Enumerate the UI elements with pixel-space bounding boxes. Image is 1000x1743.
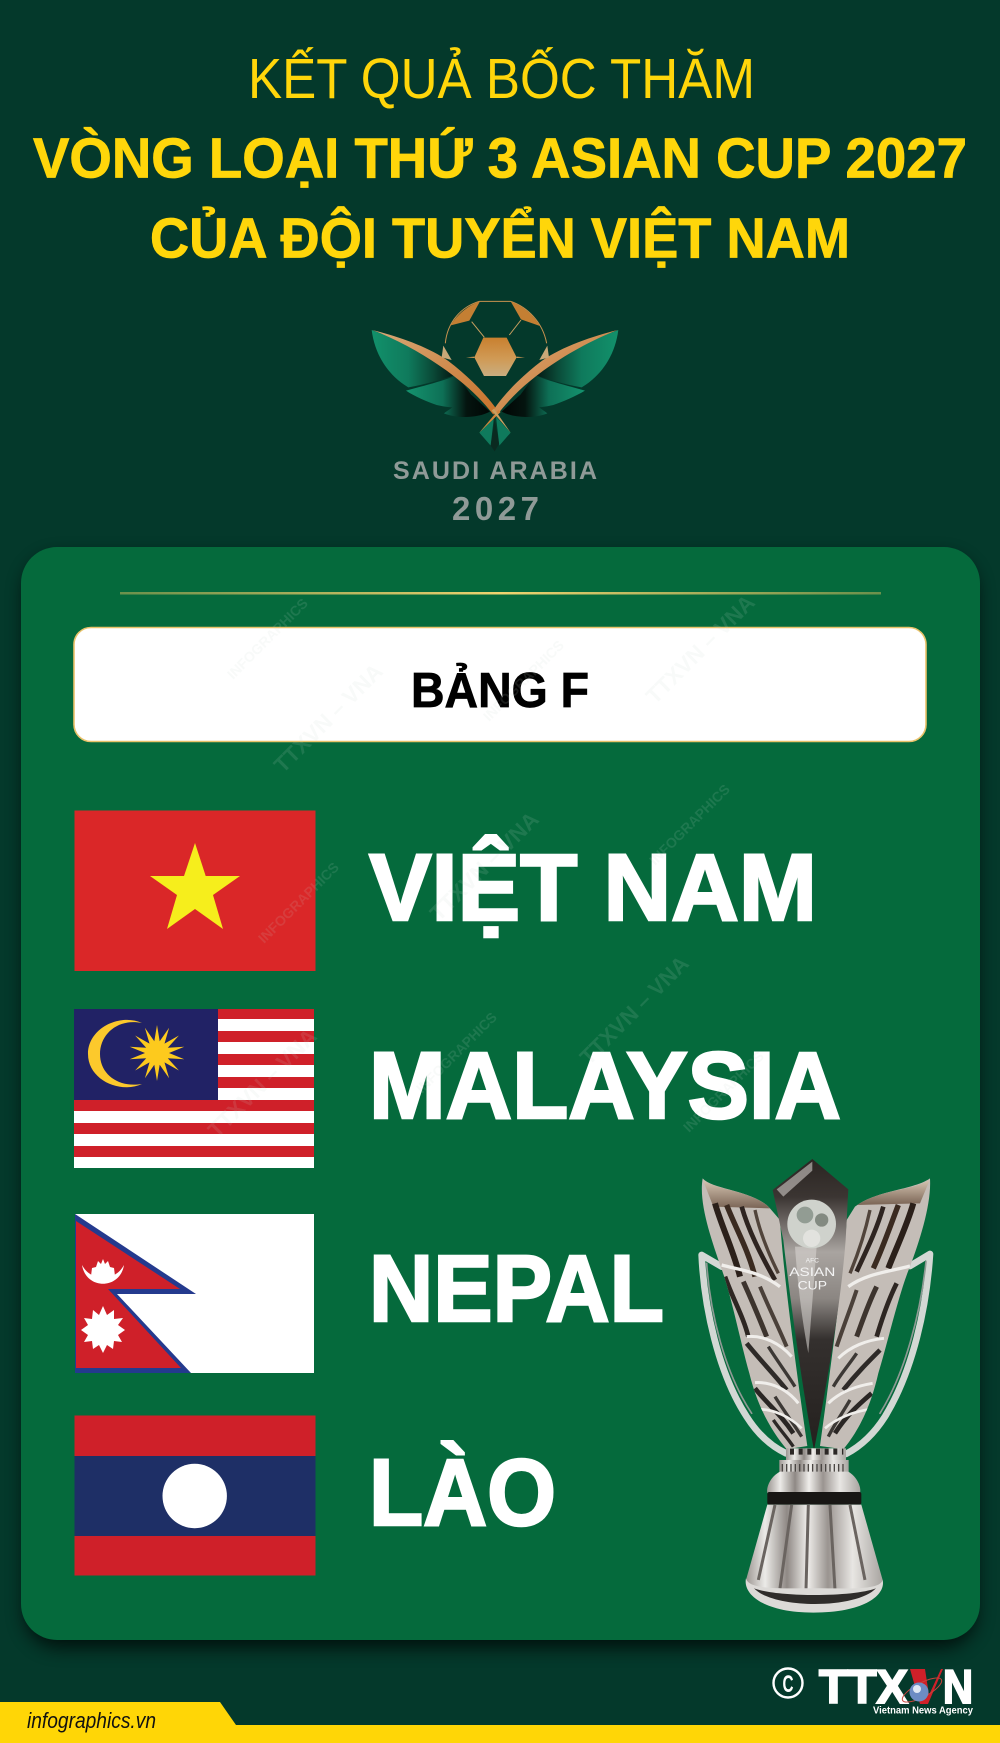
flag: Nepal	[75, 1214, 314, 1373]
panel shadow	[24, 556, 977, 1648]
central blade: AFC	[806, 1258, 819, 1265]
central blade: ASIAN	[789, 1265, 835, 1279]
watermarks: TTXVN – VNA	[425, 807, 544, 926]
copyright symbol	[774, 1668, 802, 1698]
central blade	[773, 1159, 848, 1450]
title: VÒNG LOẠI THỨ 3 ASIAN CUP 2027	[33, 126, 967, 190]
watermarks: INFOGRAPHICS	[646, 781, 733, 868]
left leaf	[702, 1178, 807, 1449]
logo: Saudi Arabia 2027: 2027	[452, 490, 539, 527]
country: Nepal: NEPAL	[369, 1236, 664, 1342]
decorative gold line	[120, 592, 881, 594]
country: Việt Nam: VIỆT NAM	[369, 835, 817, 941]
central blade: CUP	[798, 1279, 827, 1293]
watermarks: TTXVN – VNA	[575, 951, 694, 1070]
flag: Vietnam	[74, 810, 316, 971]
group label: Bảng F	[74, 628, 926, 742]
title: CỦA ĐỘI TUYỂN VIỆT NAM	[150, 206, 850, 270]
watermarks: INFOGRAPHICS	[413, 1009, 500, 1096]
footer bar: infographics.vn	[27, 1708, 156, 1733]
right leaf	[820, 1178, 930, 1449]
logo: TTXVN: TTX	[819, 1660, 908, 1713]
logo: TTXVN: N	[943, 1660, 973, 1713]
icon: football	[445, 301, 547, 376]
watermarks: INFOGRAPHICS	[255, 859, 342, 946]
title	[33, 46, 967, 270]
icon: left wing	[372, 330, 499, 451]
watermarks: INFOGRAPHICS	[224, 595, 311, 682]
watermarks: TTXVN – VNA	[203, 1024, 322, 1143]
watermarks: TTXVN – VNA	[269, 659, 388, 778]
footer bar	[0, 1702, 1000, 1743]
logo: Saudi Arabia 2027	[372, 301, 618, 527]
country: Laos: LÀO	[369, 1440, 556, 1546]
watermarks: INFOGRAPHICS	[680, 1048, 767, 1135]
watermarks: TTXVN – VNA	[641, 590, 760, 709]
panel: group F	[21, 547, 980, 1640]
logo: TTXVN	[819, 1660, 973, 1716]
trophy: AFC Asian Cup	[702, 1159, 930, 1613]
title: KẾT QUẢ BỐC THĂM	[248, 46, 755, 111]
collar and stem	[746, 1448, 883, 1613]
flag: Malaysia	[74, 1009, 314, 1168]
icon: right wing	[479, 330, 618, 446]
handles	[702, 1254, 930, 1454]
country: Malaysia: MALAYSIA	[369, 1033, 841, 1139]
flag: Laos	[74, 1416, 316, 1576]
copyright symbol: C	[782, 1671, 794, 1698]
logo: TTXVN: Vietnam News Agency	[873, 1704, 973, 1716]
logo: Saudi Arabia 2027: SAUDI ARABIA	[393, 457, 597, 485]
watermarks: INFOGRAPHICS	[480, 637, 567, 724]
group label: Bảng F: BẢNG F	[411, 663, 589, 718]
watermarks	[203, 590, 767, 1143]
